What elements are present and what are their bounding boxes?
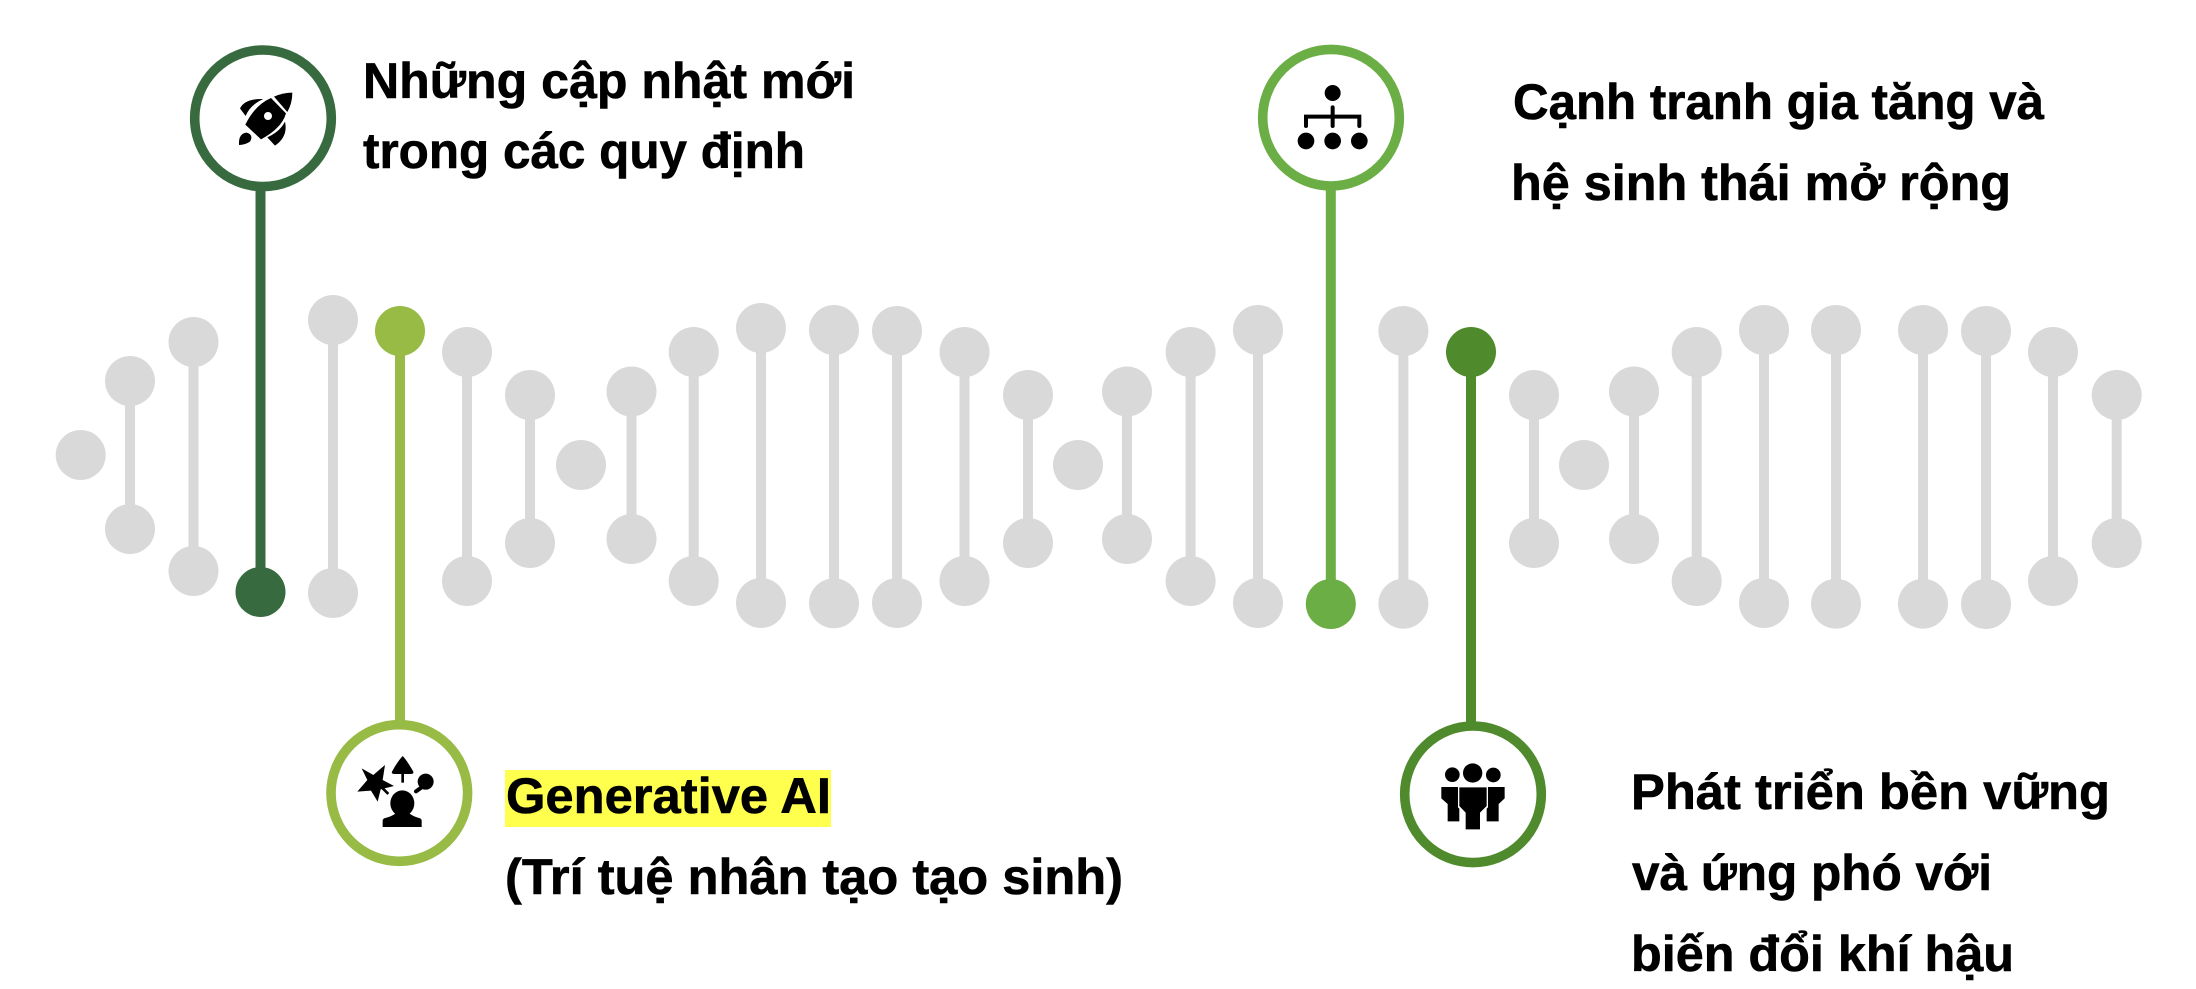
heading: sustainability and climate: Phát triển bền vững xyxy=(1631,764,2110,820)
connector: mid green stem and dot xyxy=(1306,180,1356,629)
panel: regulatory updates xyxy=(195,50,855,617)
heading: regulatory updates xyxy=(363,53,855,179)
icon ring: dark green xyxy=(195,50,331,187)
panel: sustainability and climate xyxy=(1405,327,2110,982)
panel: generative AI xyxy=(331,306,1123,905)
icon: organisation tree xyxy=(1298,85,1368,149)
highlighted title: Generative AI: Generative AI xyxy=(506,768,831,824)
connector: dark green stem and dot xyxy=(236,180,286,617)
heading: competition and ecosystem xyxy=(1511,74,2044,211)
connector: light green stem and dot xyxy=(375,306,425,726)
heading: competition and ecosystem: Cạnh tranh gia tăng và xyxy=(1513,74,2044,130)
icon ring: light green xyxy=(331,725,468,861)
connector: dark olive green stem and dot xyxy=(1446,327,1496,727)
icon: group of people xyxy=(1441,763,1505,829)
heading: sustainability and climate: biến đổi khí hậu xyxy=(1631,926,2014,982)
grey DNA strand background xyxy=(56,295,2142,629)
icon: person with ideas xyxy=(357,756,434,827)
icon ring: dark olive green xyxy=(1405,726,1541,863)
heading: sustainability and climate xyxy=(1631,764,2110,982)
panel: competition and ecosystem xyxy=(1263,49,2044,629)
icon: rocket xyxy=(239,93,292,146)
heading: regulatory updates: trong các quy định xyxy=(363,123,805,179)
heading: sustainability and climate: và ứng phó với xyxy=(1632,845,1992,901)
heading: regulatory updates: Những cập nhật mới xyxy=(363,53,855,109)
subtitle: Vietnamese translation: (Trí tuệ nhân tạo tạo sinh) xyxy=(505,849,1123,905)
icon ring: mid green xyxy=(1263,49,1399,186)
heading: competition and ecosystem: hệ sinh thái mở rộng xyxy=(1511,155,2011,211)
